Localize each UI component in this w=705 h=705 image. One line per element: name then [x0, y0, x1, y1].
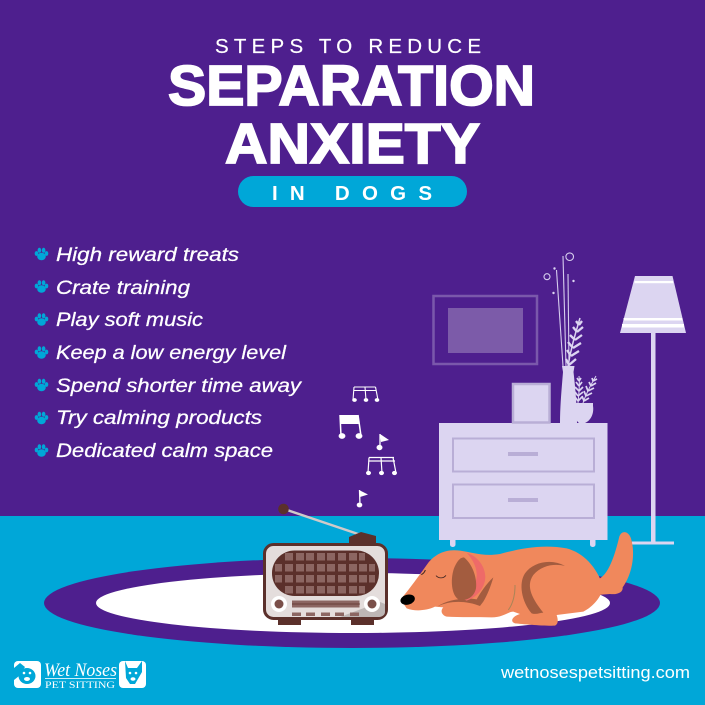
wall picture frame	[434, 296, 537, 364]
rug	[44, 558, 660, 648]
note: triple small top	[352, 387, 379, 402]
knobs	[271, 596, 287, 612]
floor lamp	[620, 276, 686, 544]
nose	[399, 593, 416, 606]
note: single low	[357, 490, 368, 507]
ear	[452, 557, 476, 600]
subtitle pill: IN DOGS	[272, 182, 432, 205]
small photo frame	[513, 384, 550, 422]
logo: wordmark: PET SITTING	[45, 681, 115, 691]
step: Crate training: Crate training	[56, 278, 191, 299]
collar	[462, 553, 485, 601]
buttons	[292, 612, 359, 616]
note: single mid	[376, 434, 389, 450]
website url: wetnosespetsitting.com	[500, 663, 690, 682]
step: Spend shorter time away: Spend shorter time away	[56, 376, 303, 397]
note: triple lower	[366, 458, 397, 475]
title: ANXIETY	[225, 112, 480, 176]
body and head	[401, 547, 603, 626]
tuner dial	[292, 600, 360, 608]
subtitle pill	[238, 176, 467, 207]
step: Try calming products: Try calming products	[56, 408, 263, 429]
haunch shadow	[522, 562, 565, 614]
step: Dedicated calm space: Dedicated calm space	[56, 441, 273, 462]
note: large double	[339, 415, 362, 439]
logo: left badge	[14, 661, 41, 688]
sleeping dog	[399, 532, 633, 626]
step: High reward treats: High reward treats	[56, 245, 240, 266]
vases with plants	[544, 253, 597, 423]
list of steps	[35, 245, 303, 462]
step: Keep a low energy level: Keep a low energy level	[56, 343, 287, 364]
front leg shadow	[437, 577, 493, 607]
logo	[14, 660, 146, 691]
logo: right badge	[119, 661, 146, 688]
logo: wordmark	[44, 660, 117, 691]
step: Play soft music: Play soft music	[56, 310, 204, 331]
speaker grille	[275, 553, 375, 594]
title: STEPS TO REDUCE	[215, 35, 481, 58]
eye	[436, 575, 446, 578]
radio	[264, 504, 386, 625]
title	[168, 35, 535, 176]
logo: wordmark: Wet Noses	[44, 660, 117, 681]
dresser	[439, 423, 608, 547]
title: SEPARATION	[168, 54, 535, 118]
tail	[597, 532, 633, 595]
music notes	[339, 387, 397, 507]
